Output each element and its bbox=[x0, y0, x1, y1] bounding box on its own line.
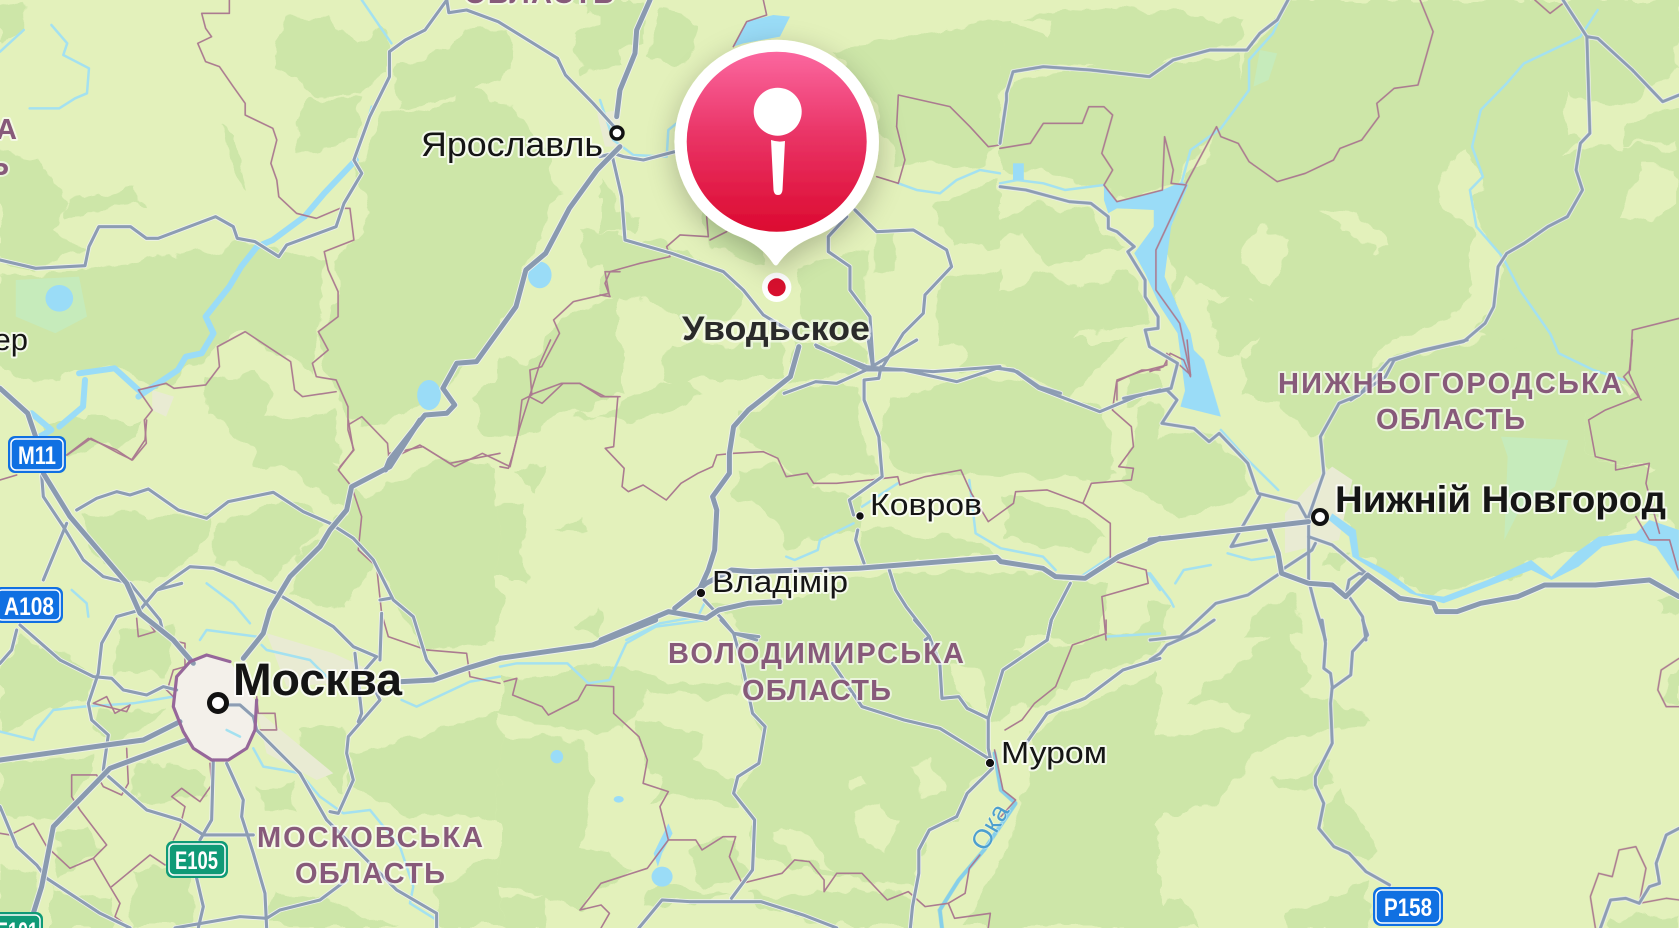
city: Nizhny Novgorod: Нижній Новгород bbox=[1335, 479, 1666, 520]
region labels: ОБЛАСТЬ bbox=[295, 858, 445, 890]
badge: P158: Р158 bbox=[1384, 894, 1432, 922]
Moscow ring road bbox=[173, 655, 257, 760]
pin body bbox=[674, 40, 879, 265]
city: Vladimir: Владімір bbox=[712, 564, 848, 599]
region labels: МОСКОВСЬКА bbox=[257, 822, 483, 854]
badge: A108: A108 bbox=[4, 593, 54, 621]
badge: M11: M11 bbox=[18, 442, 56, 470]
pin icon bbox=[754, 88, 802, 195]
region labels: ОБЛАСТЬ bbox=[1376, 404, 1525, 436]
pin face bbox=[687, 52, 867, 232]
city: Kovrov: Ковров bbox=[870, 487, 982, 522]
region labels: ОБЛАСТЬ bbox=[742, 675, 891, 707]
map pin bbox=[674, 40, 879, 265]
region labels: ВОЛОДИМИРСЬКА bbox=[668, 638, 964, 670]
badge: E105 bbox=[166, 841, 228, 878]
light clearings bbox=[774, 13, 1679, 867]
wetlands bbox=[16, 50, 1568, 540]
place label: Uvodskoe: Уводьское bbox=[682, 310, 870, 348]
location dot bbox=[762, 273, 791, 302]
urban areas bbox=[152, 110, 1352, 780]
city: Yaroslavl: Ярославль bbox=[421, 126, 603, 164]
river label: Oka: Ока bbox=[965, 798, 1016, 855]
city: Murom: Муром bbox=[1001, 735, 1107, 770]
badge: M11 bbox=[8, 436, 66, 473]
city: Moscow: Москва bbox=[233, 654, 403, 705]
badge: E101 bbox=[0, 912, 43, 928]
badge: E105: E105 bbox=[175, 847, 218, 875]
region labels: НИЖНЬОГОРОДСЬКА bbox=[1278, 368, 1622, 400]
badge: P158 bbox=[1373, 887, 1443, 926]
